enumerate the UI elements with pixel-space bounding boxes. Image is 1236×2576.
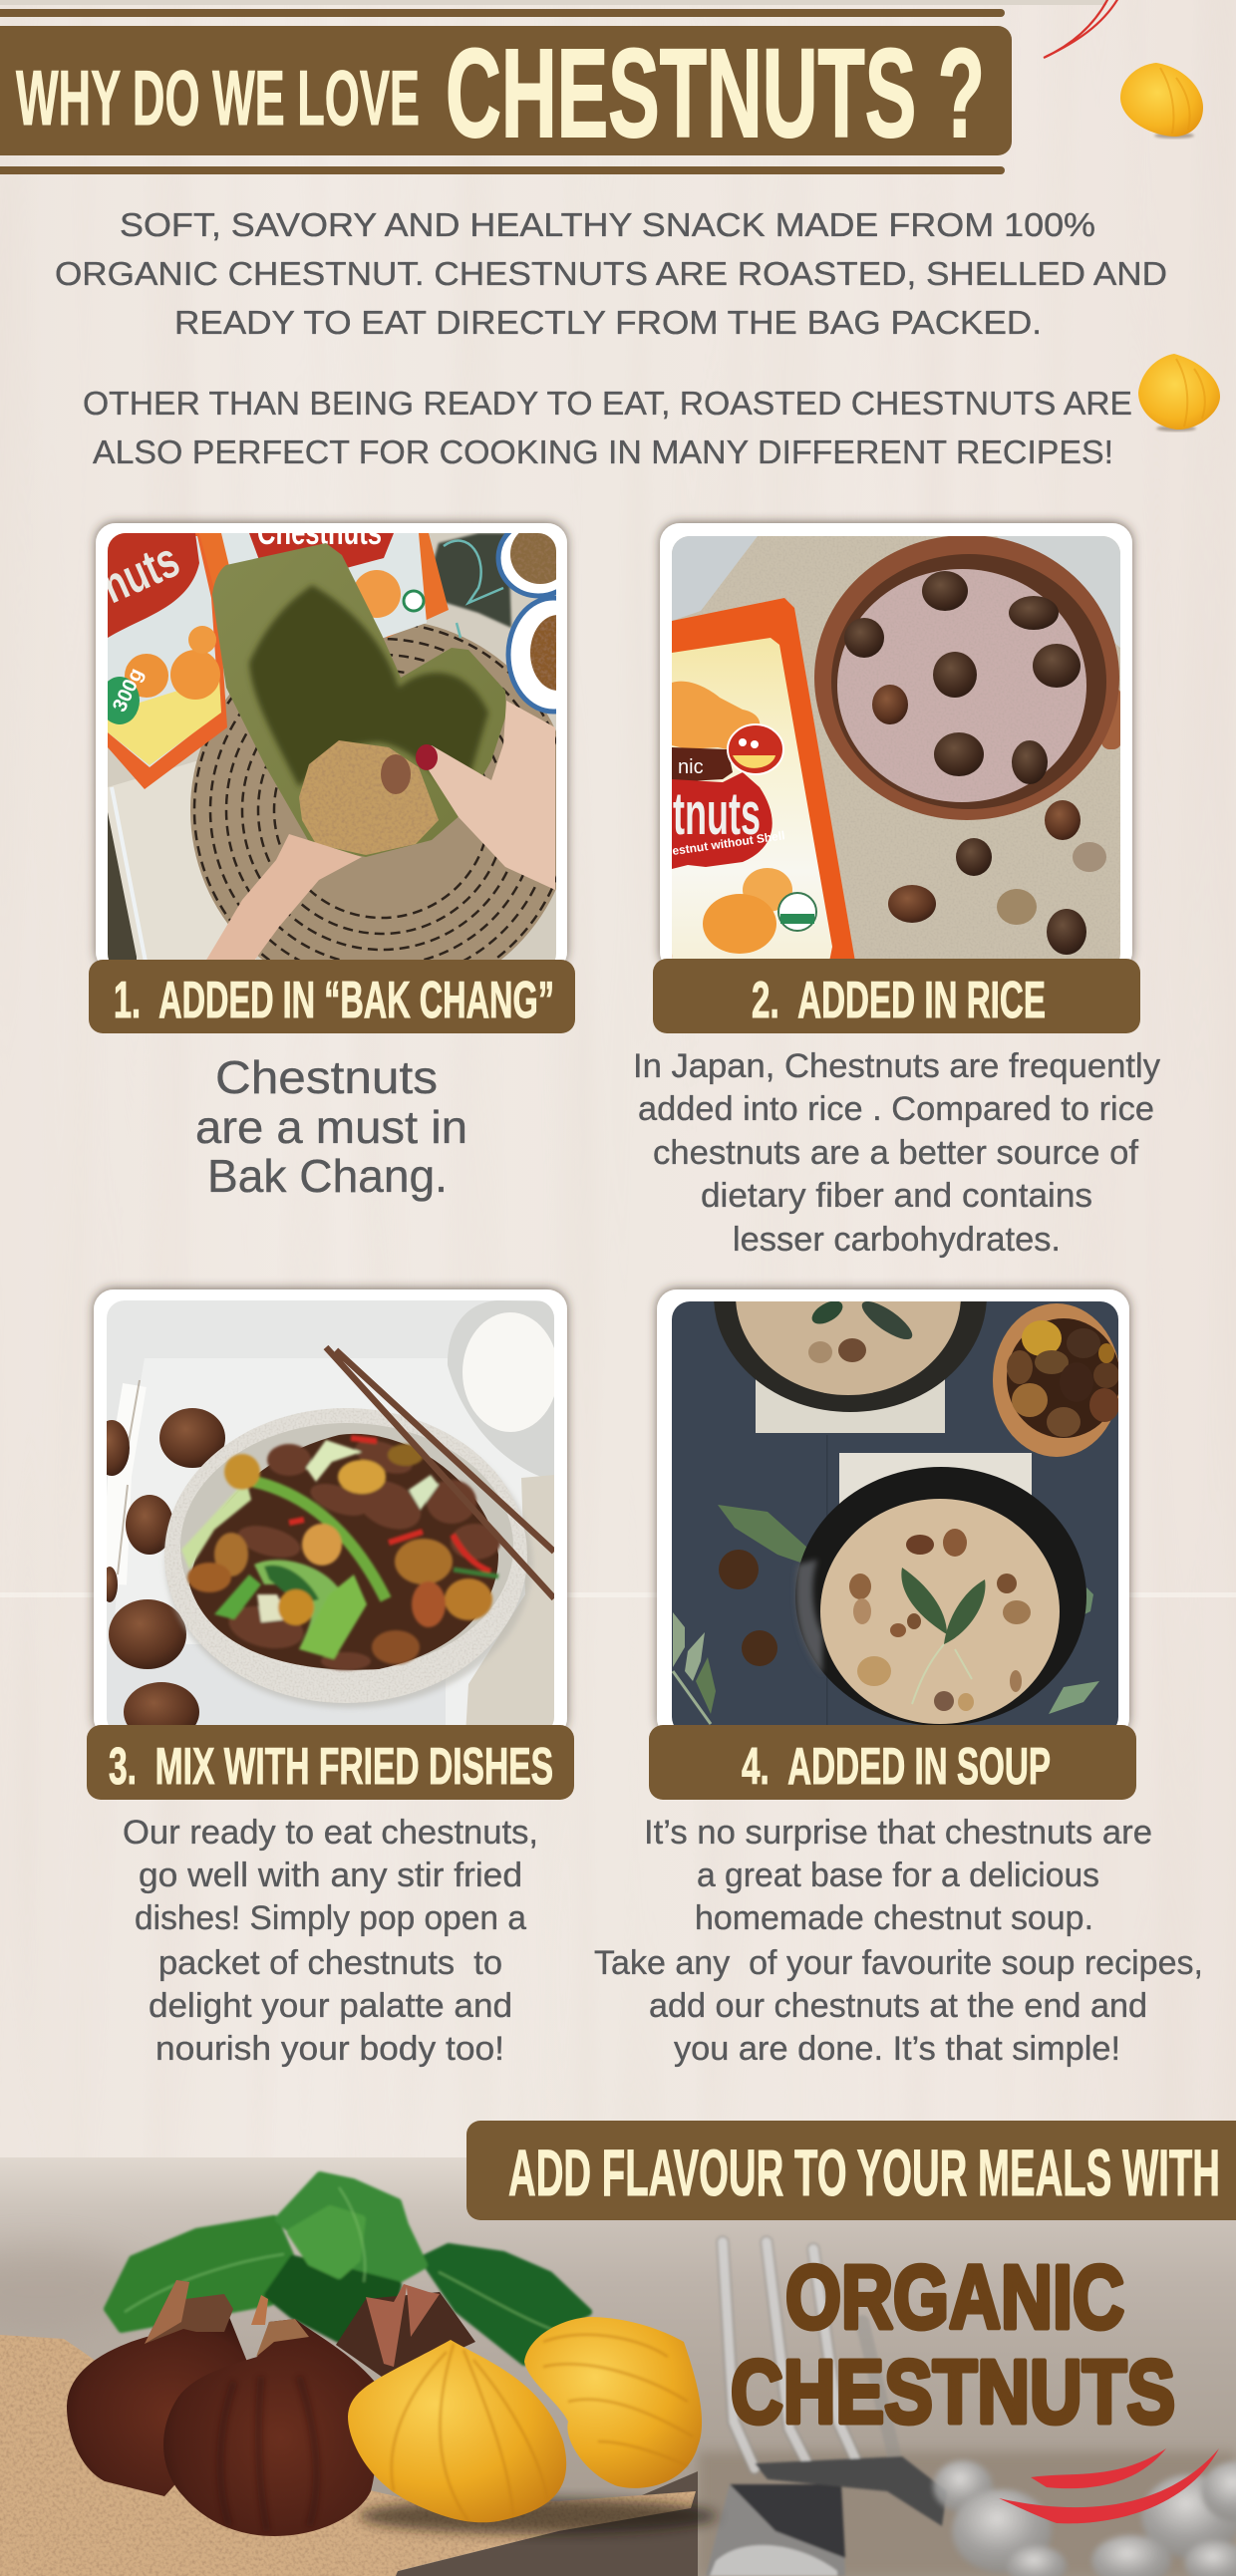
loose chestnuts xyxy=(719,1550,759,1589)
shadow under nuts xyxy=(359,2498,718,2534)
zongzi and plates xyxy=(424,533,511,628)
leaf wrapper xyxy=(212,543,506,857)
chestnuts in soup xyxy=(849,1529,1031,1711)
banner: add flavour xyxy=(466,2121,1236,2220)
intro paragraph: ORGANIC CHESTNUT. CHESTNUTS ARE ROASTED, SHELLED AND xyxy=(55,255,1167,292)
label: mix with fried dishes: 3. MIX WITH FRIED DISHES xyxy=(109,1738,553,1796)
top soup bowl xyxy=(714,1179,987,1412)
bowl xyxy=(163,1475,532,1710)
text: mix with fried dishes: go well with any stir fried xyxy=(139,1857,522,1894)
panel: added in rice xyxy=(660,523,1132,972)
text: added in soup: add our chestnuts at the end and xyxy=(649,1987,1147,2025)
chopsticks xyxy=(326,1347,554,1598)
fork xyxy=(706,2242,947,2576)
label: added in bak chang xyxy=(89,960,575,1033)
top snack bag xyxy=(199,533,449,638)
text: mix with fried dishes: delight your palatte and xyxy=(149,1987,512,2025)
second paragraph: OTHER THAN BEING READY TO EAT, ROASTED CHESTNUTS ARE xyxy=(83,385,1132,422)
label: added in soup xyxy=(649,1725,1136,1800)
text: added in soup: Take any of your favourite soup recipes, xyxy=(594,1944,1203,1982)
sage leaves outside bowl xyxy=(718,1505,807,1563)
text: mix with fried dishes: nourish your body too! xyxy=(155,2030,504,2068)
text: added in rice: lesser carbohydrates. xyxy=(733,1221,1061,1259)
intro paragraph: READY TO EAT DIRECTLY FROM THE BAG PACKED. xyxy=(174,304,1042,341)
text: added in soup xyxy=(594,1814,1203,2068)
photo: wrapping bak chang xyxy=(108,533,556,960)
label: added in soup: 4. ADDED IN SOUP xyxy=(742,1738,1051,1796)
napkin xyxy=(465,1475,554,1735)
text: added in soup: homemade chestnut soup. xyxy=(695,1899,1093,1937)
heading: organic chestnuts xyxy=(731,2248,1175,2442)
text: added in soup: a great base for a delicious xyxy=(697,1857,1099,1894)
panel: mix with fried dishes xyxy=(94,1289,567,1742)
label: added in rice: 2. ADDED IN RICE xyxy=(752,972,1046,1029)
intro paragraph xyxy=(55,206,1167,341)
photo: rice with chestnuts xyxy=(671,535,1121,972)
icon: golden chestnut beside text xyxy=(1138,354,1220,431)
beef xyxy=(225,1434,500,1670)
woven mat xyxy=(190,624,556,960)
red chilli xyxy=(289,1438,490,1572)
label: added in rice xyxy=(653,959,1140,1033)
bok choy xyxy=(181,1480,251,1570)
photo: wrapping bak chang: 300g xyxy=(109,665,148,716)
rice bowl xyxy=(448,1300,554,1481)
photo: chestnut soup xyxy=(672,1179,1120,1735)
text: added in soup: It’s no surprise that chestnuts are xyxy=(644,1814,1152,1852)
golden chestnut right xyxy=(524,2317,702,2488)
text: bak chang xyxy=(195,1051,467,1202)
text: added in rice: added into rice . Compared to rice xyxy=(638,1090,1154,1128)
photo: wrapping bak chang: Chestnuts xyxy=(257,514,382,552)
left snack bag xyxy=(108,533,227,789)
decorative red swoosh top xyxy=(1044,0,1118,58)
text: mix with fried dishes: packet of chestnuts to xyxy=(158,1944,502,1982)
photo: rice with chestnuts: tnuts xyxy=(673,780,761,847)
second paragraph: ALSO PERFECT FOR COOKING IN MANY DIFFERENT RECIPES! xyxy=(93,433,1113,470)
dark chestnut back xyxy=(336,2292,475,2382)
footer photo xyxy=(0,2157,1236,2576)
hands xyxy=(419,701,555,890)
silver fork beads xyxy=(933,2460,1236,2576)
napkins xyxy=(756,1375,945,1433)
text: added in rice xyxy=(633,1047,1160,1259)
loose chestnuts xyxy=(888,800,1106,955)
wooden table xyxy=(379,2471,698,2576)
panel: added in soup xyxy=(657,1179,1129,1738)
panel: added in bak chang xyxy=(88,514,574,964)
basil leaves xyxy=(108,2175,588,2362)
snack bag xyxy=(672,598,855,972)
second paragraph xyxy=(83,385,1132,470)
snap pea xyxy=(246,1480,386,1599)
heading: why do we love: WHY DO WE LOVE xyxy=(16,54,420,142)
text: mix with fried dishes: dishes! Simply pop open a xyxy=(135,1899,526,1937)
main soup bowl xyxy=(795,1467,1086,1726)
intro paragraph: SOFT, SAVORY AND HEALTHY SNACK MADE FROM 100% xyxy=(120,206,1095,243)
icon: golden chestnut top xyxy=(1120,63,1203,139)
photo: rice with chestnuts: estnut without Shell xyxy=(671,828,785,858)
chestnut pieces xyxy=(338,1460,386,1494)
loose chestnuts xyxy=(107,1408,225,1725)
sage garnish xyxy=(901,1568,947,1634)
bowl xyxy=(1102,690,1120,749)
photo: wrapping bak chang: nuts xyxy=(94,531,187,614)
header banner xyxy=(0,9,1012,174)
dark chestnut left xyxy=(67,2317,259,2496)
text: added in soup: you are done. It’s that simple! xyxy=(674,2030,1120,2068)
golden chestnut left xyxy=(348,2340,566,2522)
text: added in rice: chestnuts are a better source of xyxy=(653,1134,1139,1172)
photo: rice with chestnuts: nic xyxy=(678,756,704,778)
dark chestnut center xyxy=(163,2319,378,2536)
red swooshes xyxy=(999,2448,1219,2523)
text: bak chang: Chestnuts xyxy=(215,1051,438,1103)
photo: stir fry xyxy=(94,1300,558,1742)
text: bak chang: are a must in xyxy=(195,1101,467,1153)
cracker xyxy=(0,2335,696,2576)
text: mix with fried dishes: Our ready to eat chestnuts, xyxy=(123,1814,538,1852)
text: added in rice: dietary fiber and contains xyxy=(701,1177,1092,1215)
heading: organic chestnuts: ORGANIC xyxy=(785,2248,1124,2348)
text: mix with fried dishes xyxy=(123,1814,538,2068)
label: mix with fried dishes xyxy=(87,1725,574,1800)
label: added in bak chang: 1. ADDED IN “BAK CHANG” xyxy=(114,972,554,1029)
text: bak chang: Bak Chang. xyxy=(207,1150,448,1202)
text: added in rice: In Japan, Chestnuts are frequently xyxy=(633,1047,1160,1085)
rice filling xyxy=(299,740,439,855)
chestnut bowl xyxy=(993,1303,1120,1457)
